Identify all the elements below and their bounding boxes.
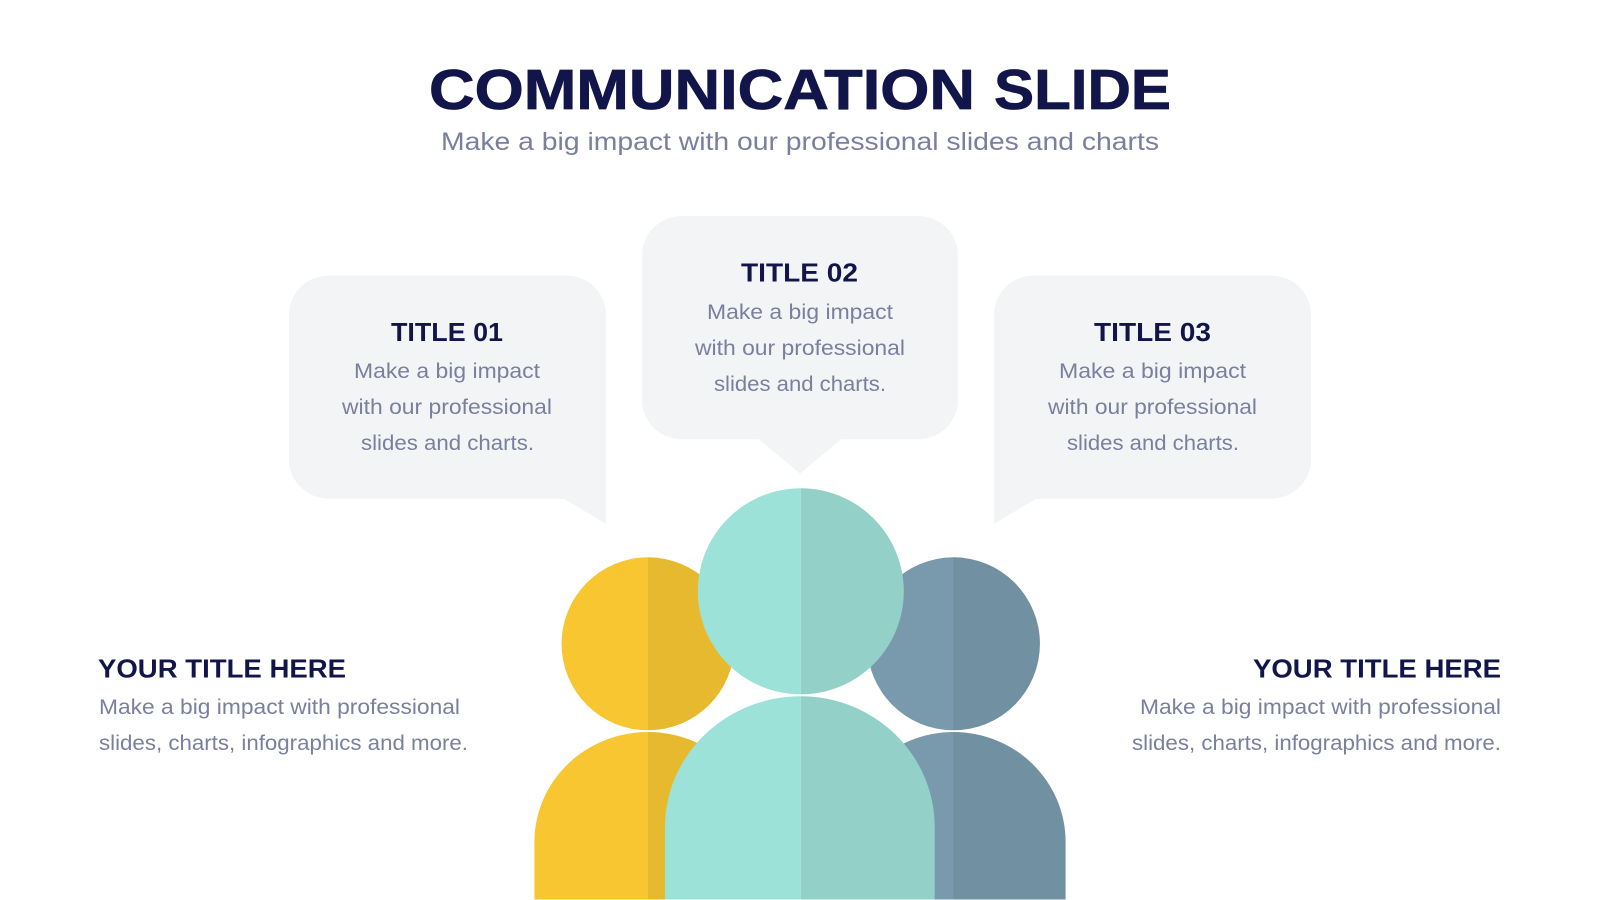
- text block: right: slides, charts, infographics and more.: [1132, 732, 1501, 755]
- text block: left: [98, 654, 468, 755]
- title: SLIDE: [994, 58, 1171, 122]
- panel: speech bubble title 01: with our professional: [341, 396, 552, 419]
- panel: speech bubble title 01: TITLE 01: [391, 317, 503, 347]
- panel: speech bubble title 01: Make a big impact: [354, 360, 540, 383]
- panel: speech bubble title 02: with our professional: [694, 337, 905, 360]
- panel: speech bubble title 03: with our professional: [1047, 396, 1257, 419]
- title: COMMUNICATION: [429, 58, 975, 122]
- panel: speech bubble title 03: [994, 275, 1311, 524]
- panel: speech bubble title 03: slides and charts.: [1067, 432, 1239, 455]
- text block: right: YOUR TITLE HERE: [1253, 654, 1501, 684]
- panel: speech bubble title 02: slides and charts.: [714, 373, 886, 396]
- text block: right: [1132, 654, 1501, 755]
- text block: left: slides, charts, infographics and more.: [99, 732, 468, 755]
- panel: speech bubble title 02: Make a big impact: [707, 301, 893, 324]
- panel: speech bubble title 01: slides and charts.: [361, 432, 534, 455]
- subtitle: Make a big impact with our professional slides and charts: [441, 128, 1159, 156]
- text block: right: Make a big impact with professional: [1140, 696, 1501, 719]
- icon: teal person: [665, 488, 935, 900]
- panel: speech bubble title 03: TITLE 03: [1094, 317, 1211, 347]
- icon: blue person: [841, 557, 1066, 900]
- text block: left: YOUR TITLE HERE: [98, 654, 346, 684]
- panel: speech bubble title 03: Make a big impact: [1059, 360, 1246, 383]
- text block: left: Make a big impact with professional: [99, 696, 460, 719]
- panel: speech bubble title 02: [642, 216, 958, 474]
- panel: speech bubble title 02: TITLE 02: [741, 258, 858, 288]
- icon: yellow person: [534, 557, 762, 900]
- panel: speech bubble title 01: [289, 276, 606, 524]
- title: [429, 58, 1171, 122]
